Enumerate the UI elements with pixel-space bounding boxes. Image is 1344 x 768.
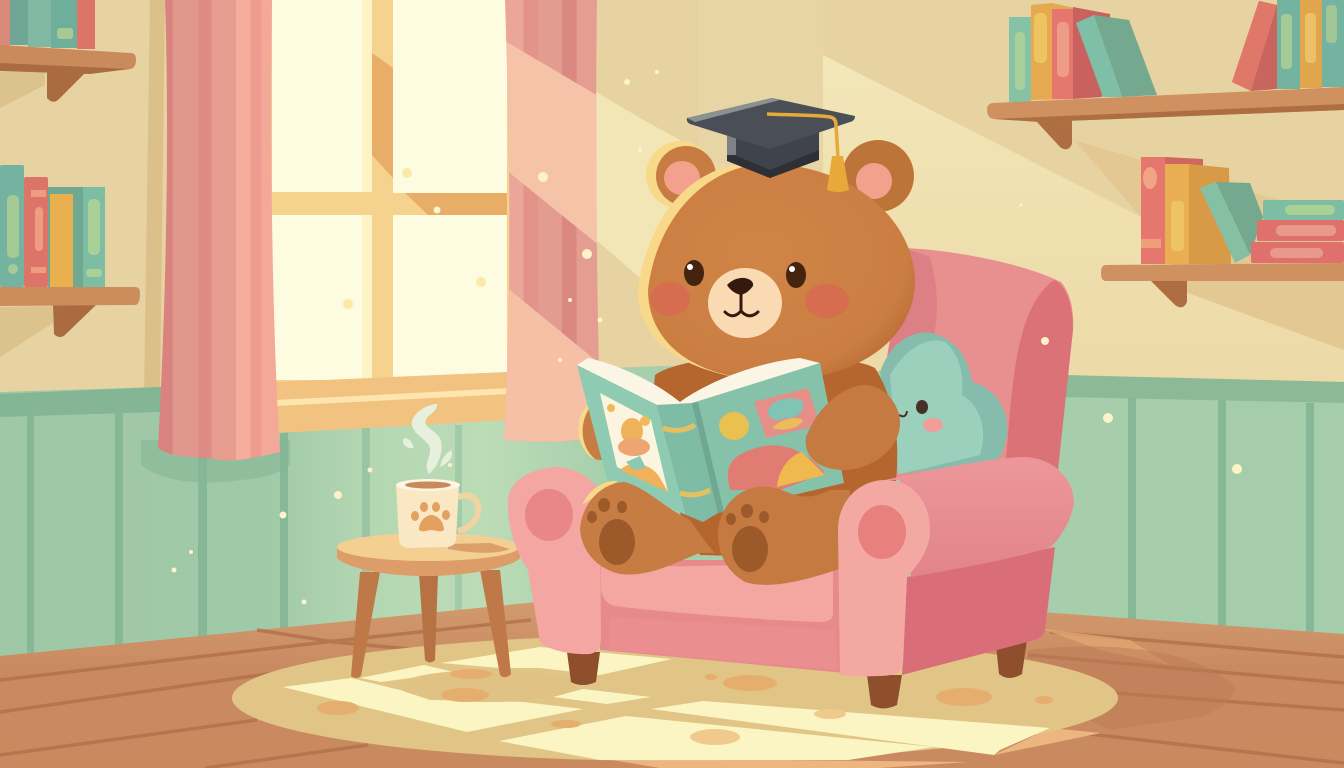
- bear: [577, 140, 915, 585]
- shelf top left: [0, 0, 136, 102]
- chair legs: [567, 640, 1027, 708]
- eyes: [684, 260, 704, 286]
- feet: [580, 481, 850, 585]
- bear body: [654, 355, 897, 560]
- curtain left: [158, 0, 280, 461]
- window: [270, 0, 510, 433]
- graduation cap: [687, 98, 855, 192]
- book: [577, 358, 844, 522]
- muzzle: [708, 268, 782, 338]
- shelf mid left: [0, 165, 140, 337]
- floor: [0, 602, 1344, 768]
- rug: [232, 635, 1118, 761]
- head: [638, 162, 800, 382]
- left arm: [508, 467, 601, 654]
- shelf lower right: [1101, 157, 1344, 307]
- side table: [337, 533, 520, 678]
- bear ears: [646, 140, 914, 212]
- armchair: [508, 248, 1073, 708]
- right arm of bear: [806, 385, 900, 470]
- curtain right: [504, 0, 600, 442]
- chair back: [880, 248, 1073, 480]
- mug with paw print: [396, 479, 478, 548]
- wainscot panelling: [0, 366, 1344, 660]
- cheeks: [650, 282, 690, 316]
- chair base: [600, 560, 845, 673]
- shelf top right: [987, 0, 1344, 149]
- cushion: [880, 332, 1007, 474]
- steam: [403, 404, 452, 474]
- dust motes: [172, 70, 1242, 604]
- wall: [0, 0, 1344, 420]
- left hand of bear: [578, 403, 612, 459]
- armchair right arm: [838, 457, 1074, 676]
